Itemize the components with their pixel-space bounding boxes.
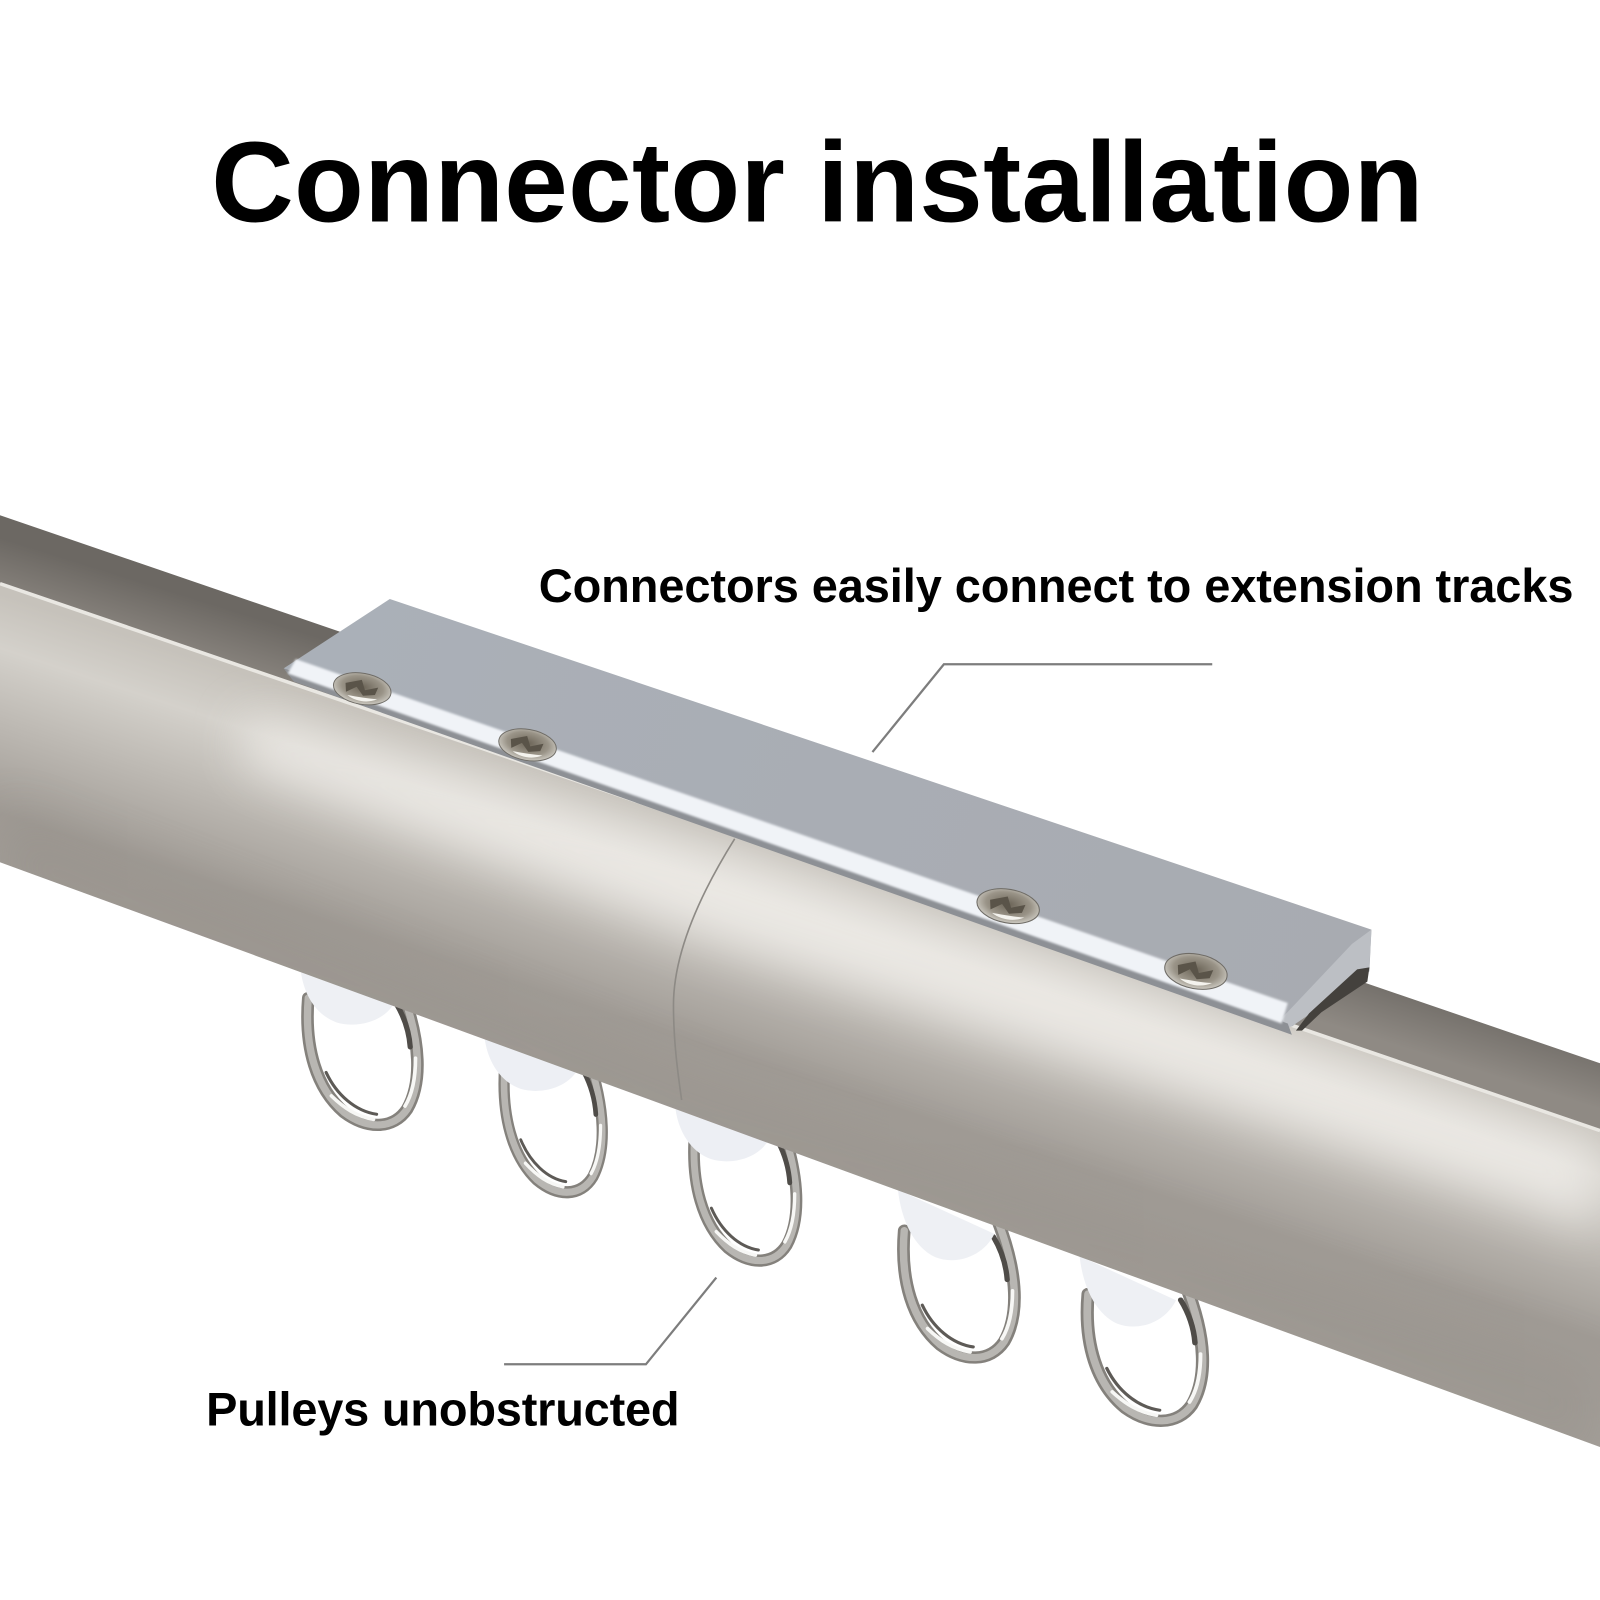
leader line: connectors — [872, 664, 1212, 752]
leader line: pulleys — [504, 1278, 716, 1364]
tube joint seam — [673, 839, 735, 1100]
curtain rail tube — [0, 584, 1600, 1469]
ring 1 — [301, 972, 417, 1125]
title: Connector installation — [211, 119, 1423, 246]
extension track — [0, 515, 1600, 1135]
connector lower edge shadow — [284, 668, 1292, 1035]
curtain rings and pulleys — [301, 972, 1203, 1421]
label: pulleys: Pulleys unobstructed — [206, 1384, 680, 1436]
ring 4 — [898, 1190, 1014, 1358]
screw 2 — [496, 725, 559, 765]
connector top plate — [284, 599, 1371, 1027]
ring 2 — [485, 1039, 602, 1192]
screw 4 — [1162, 949, 1230, 994]
screw 1 — [331, 668, 394, 709]
screw 3 — [974, 884, 1042, 928]
connector bright edge — [288, 659, 1288, 1023]
connector end opening — [1282, 930, 1371, 1029]
label: connectors: Connectors easily connect to extension tracks — [539, 560, 1573, 612]
aluminium connector — [284, 599, 1371, 1035]
ring 5 — [1080, 1256, 1203, 1421]
ring 3 — [676, 1109, 796, 1261]
